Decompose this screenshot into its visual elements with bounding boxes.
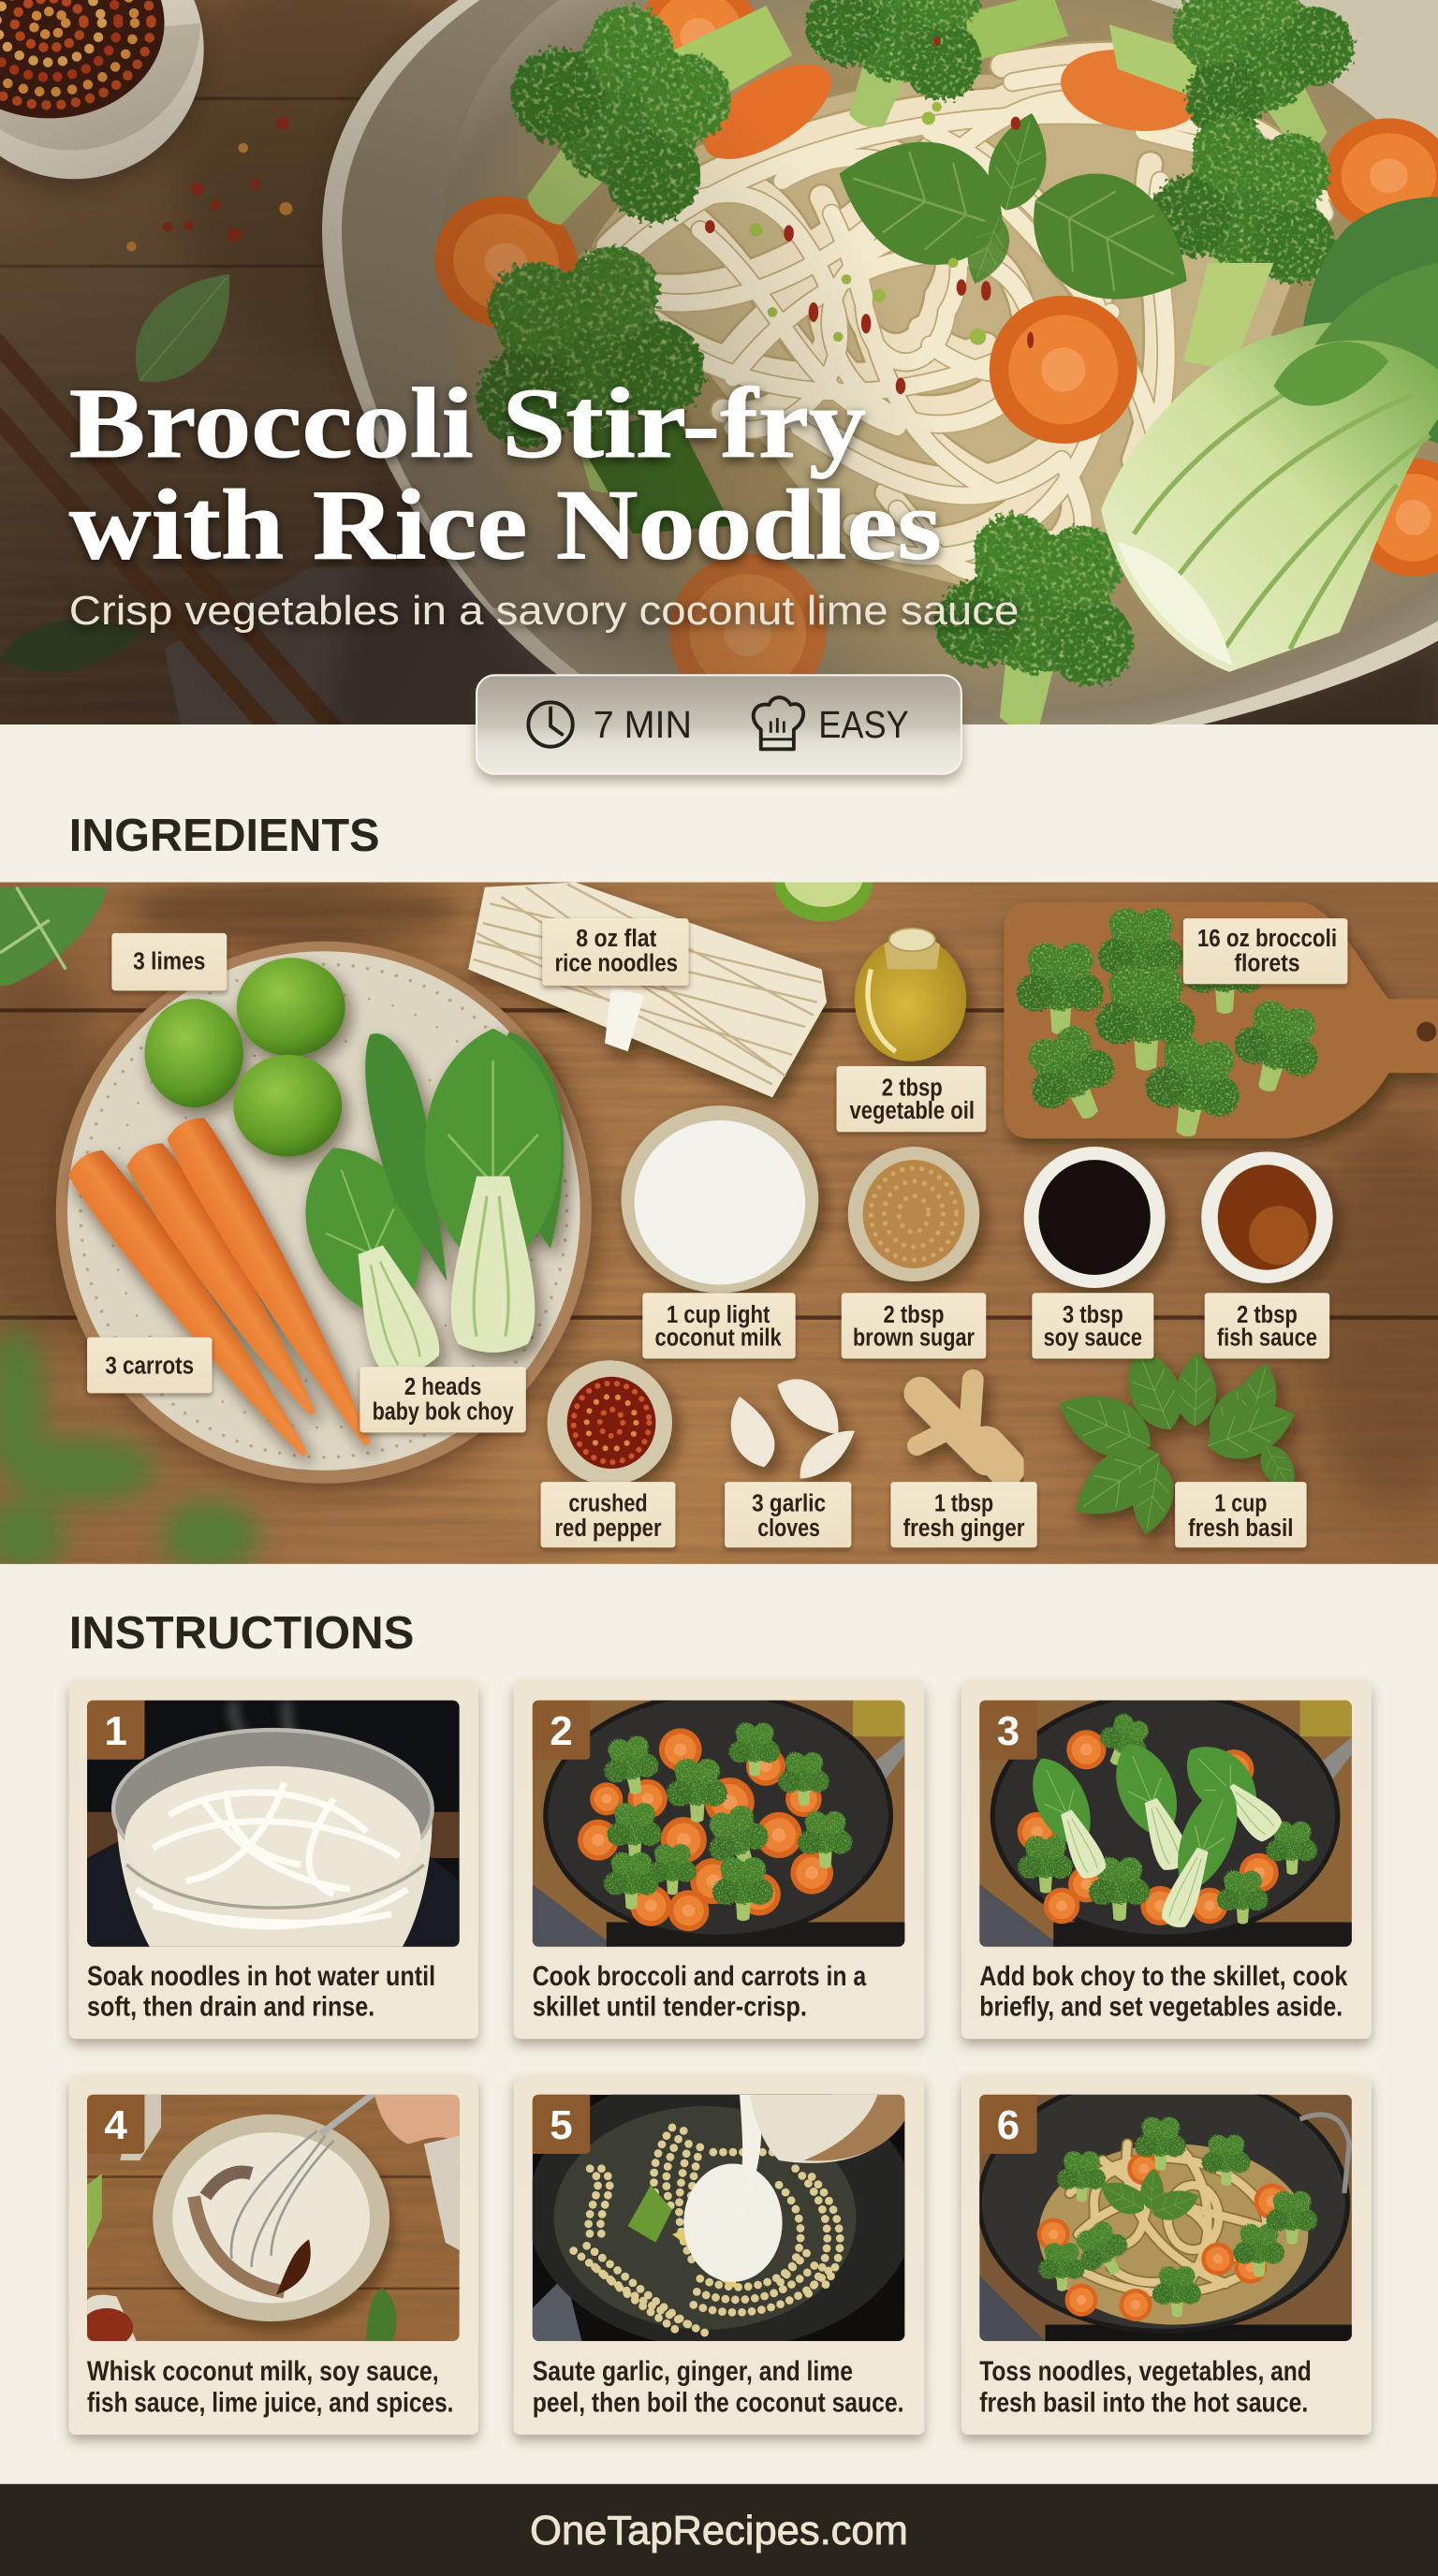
step number 6: 6: [997, 2102, 1020, 2148]
step number 3: [979, 1701, 1037, 1760]
label: basil: fresh basil: [1188, 1514, 1294, 1542]
step 3 text: [979, 1961, 1348, 2023]
label: coconut milk: [642, 1293, 796, 1358]
oil jar: [855, 929, 966, 1061]
carrots: [416, 0, 1438, 711]
title: [69, 369, 942, 581]
ginger root: [917, 1380, 1005, 1467]
step 6 text: [979, 2356, 1312, 2418]
time text: 7 MIN: [594, 703, 692, 746]
label: brown sugar: 2 tbsp: [884, 1300, 944, 1328]
step 2 text: skillet until tender-crisp.: [533, 1992, 807, 2023]
label: coconut milk: coconut milk: [655, 1323, 782, 1351]
icon: clock: [528, 702, 573, 747]
step 2 text: Cook broccoli and carrots in a: [533, 1961, 866, 1992]
label: ginger: fresh ginger: [903, 1514, 1025, 1542]
cutting board with broccoli: [1005, 902, 1438, 1145]
step 3 text: Add bok choy to the skillet, cook: [979, 1961, 1348, 1992]
label: rice noodles: rice noodles: [554, 948, 678, 976]
label: ginger: 1 tbsp: [934, 1489, 993, 1517]
step 6 text: fresh basil into the hot sauce.: [979, 2387, 1308, 2418]
panel: ingredients flat lay: [0, 842, 1438, 1573]
ingredients heading: INGREDIENTS: [69, 811, 380, 861]
step card 2: [514, 1680, 924, 2039]
step number 5: [533, 2095, 590, 2154]
blurred foreground leaves: [0, 1325, 259, 1573]
step card 6: [961, 2075, 1372, 2435]
label: basil: [1175, 1482, 1307, 1547]
step 3 photo: bok choy added: [979, 1694, 1353, 1947]
label: soy sauce: soy sauce: [1044, 1323, 1142, 1351]
plate with carrots, limes and bok choy: [56, 942, 596, 1490]
step 1 text: soft, then drain and rinse.: [87, 1992, 374, 2023]
label: bok choy: baby bok choy: [373, 1397, 514, 1425]
rice noodles: [592, 54, 1341, 607]
chili flakes and lime zest: [705, 37, 1034, 394]
bowl: [320, 0, 1438, 724]
footer bar: [0, 2484, 1438, 2576]
step number 4: [87, 2095, 144, 2154]
step card 4: [69, 2075, 478, 2435]
baby bok choy: [282, 1029, 564, 1390]
step number 1: [87, 1701, 144, 1760]
label: rice noodles: 8 oz flat: [576, 924, 657, 952]
loose basil leaf: [135, 274, 230, 382]
step 5 text: peel, then boil the coconut sauce.: [533, 2387, 903, 2418]
step card 3: [961, 1680, 1372, 2039]
basil sprig: [839, 112, 1187, 300]
label: fish sauce: fish sauce: [1217, 1323, 1317, 1351]
brown sugar bowl: [848, 1147, 979, 1281]
label: vegetable oil: vegetable oil: [850, 1096, 975, 1124]
subtitle: Crisp vegetables in a savory coconut lime sauce: [69, 588, 1019, 634]
step number 3: 3: [997, 1708, 1020, 1754]
label: limes: 3 limes: [133, 947, 205, 975]
bok choy: [1101, 198, 1438, 672]
step 5 text: Saute garlic, ginger, and lime: [533, 2356, 853, 2387]
label: coconut milk: 1 cup light: [667, 1300, 770, 1328]
lime half: [774, 842, 873, 922]
label: fish sauce: [1205, 1293, 1329, 1358]
step number 1: 1: [105, 1708, 127, 1754]
icon: chef hat: [754, 697, 803, 749]
step number 2: [533, 1701, 590, 1760]
crushed red pepper bowl: [548, 1360, 672, 1486]
small chili bowl: [0, 0, 204, 189]
step number 6: [979, 2095, 1037, 2154]
coconut milk bowl: [622, 1105, 818, 1293]
title: with Rice Noodles: [69, 471, 942, 581]
top-left leaves: [0, 887, 107, 986]
step 1 photo: soaking noodles: [87, 1701, 461, 1963]
step 3 text: briefly, and set vegetables aside.: [979, 1992, 1343, 2023]
label: broccoli: 16 oz broccoli: [1197, 924, 1337, 952]
difficulty text: EASY: [818, 703, 909, 746]
label: soy sauce: [1032, 1293, 1153, 1358]
fish sauce bowl: [1201, 1151, 1333, 1283]
label: crushed red pepper: red pepper: [554, 1514, 662, 1542]
chopsticks: [0, 337, 337, 731]
label: crushed red pepper: crushed: [568, 1489, 648, 1517]
step 5 text: [533, 2356, 903, 2418]
step number 5: 5: [550, 2102, 573, 2148]
cloth under chopsticks: [165, 567, 559, 724]
scattered chili flakes: [126, 117, 292, 252]
instructions heading: INSTRUCTIONS: [69, 1608, 414, 1659]
garlic cloves: [731, 1379, 855, 1479]
rice noodle bundle: [468, 882, 827, 1097]
label: garlic: [725, 1482, 851, 1547]
label: basil: 1 cup: [1214, 1489, 1267, 1517]
label: garlic: cloves: [757, 1514, 820, 1542]
fresh basil: [1048, 1338, 1305, 1538]
step 5 photo: sauteing and pouring coconut milk: [527, 2070, 916, 2349]
label: brown sugar: [842, 1293, 986, 1358]
label: fish sauce: 2 tbsp: [1237, 1300, 1298, 1328]
limes: [144, 958, 345, 1157]
label: brown sugar: brown sugar: [853, 1323, 975, 1351]
time and difficulty badge: [477, 675, 961, 774]
label: bok choy: [360, 1367, 526, 1432]
label: bok choy: 2 heads: [404, 1372, 481, 1400]
label: rice noodles: [542, 918, 689, 986]
step 2 photo: broccoli and carrots: [533, 1694, 905, 1947]
step 4 photo: whisking sauce: [81, 2086, 461, 2348]
broccoli: [450, 0, 1392, 744]
label: limes: [111, 933, 227, 990]
step 6 photo: finished toss in skillet: [979, 2075, 1353, 2341]
label: vegetable oil: [837, 1066, 986, 1132]
hero photo: noodle bowl: [0, 0, 1438, 724]
step 4 text: [87, 2356, 453, 2418]
label: garlic: 3 garlic: [752, 1489, 826, 1517]
soy sauce bowl: [1024, 1147, 1166, 1288]
step card 1: [69, 1680, 478, 2039]
label: broccoli: florets: [1234, 948, 1300, 976]
step 4 text: Whisk coconut milk, soy sauce,: [87, 2356, 439, 2387]
step number 2: 2: [550, 1708, 573, 1754]
step 1 text: [87, 1961, 435, 2023]
label: crushed red pepper: [541, 1482, 675, 1547]
title: Broccoli Stir-fry: [69, 369, 866, 479]
step card 5: [514, 2070, 924, 2435]
step 6 text: Toss noodles, vegetables, and: [979, 2356, 1312, 2387]
step 2 text: [533, 1961, 866, 2023]
step 1 text: Soak noodles in hot water until: [87, 1961, 435, 1992]
carrots: [63, 1111, 389, 1469]
label: carrots: [87, 1338, 212, 1393]
step number 4: 4: [105, 2102, 128, 2148]
label: soy sauce: 3 tbsp: [1063, 1300, 1123, 1328]
dark leaf bottom left: [0, 620, 142, 672]
label: carrots: 3 carrots: [105, 1351, 194, 1379]
label: ginger: [890, 1482, 1037, 1547]
label: broccoli: [1183, 918, 1347, 984]
footer website text: OneTapRecipes.com: [530, 2508, 908, 2554]
step 4 text: fish sauce, lime juice, and spices.: [87, 2387, 453, 2418]
label: vegetable oil: 2 tbsp: [882, 1074, 943, 1102]
